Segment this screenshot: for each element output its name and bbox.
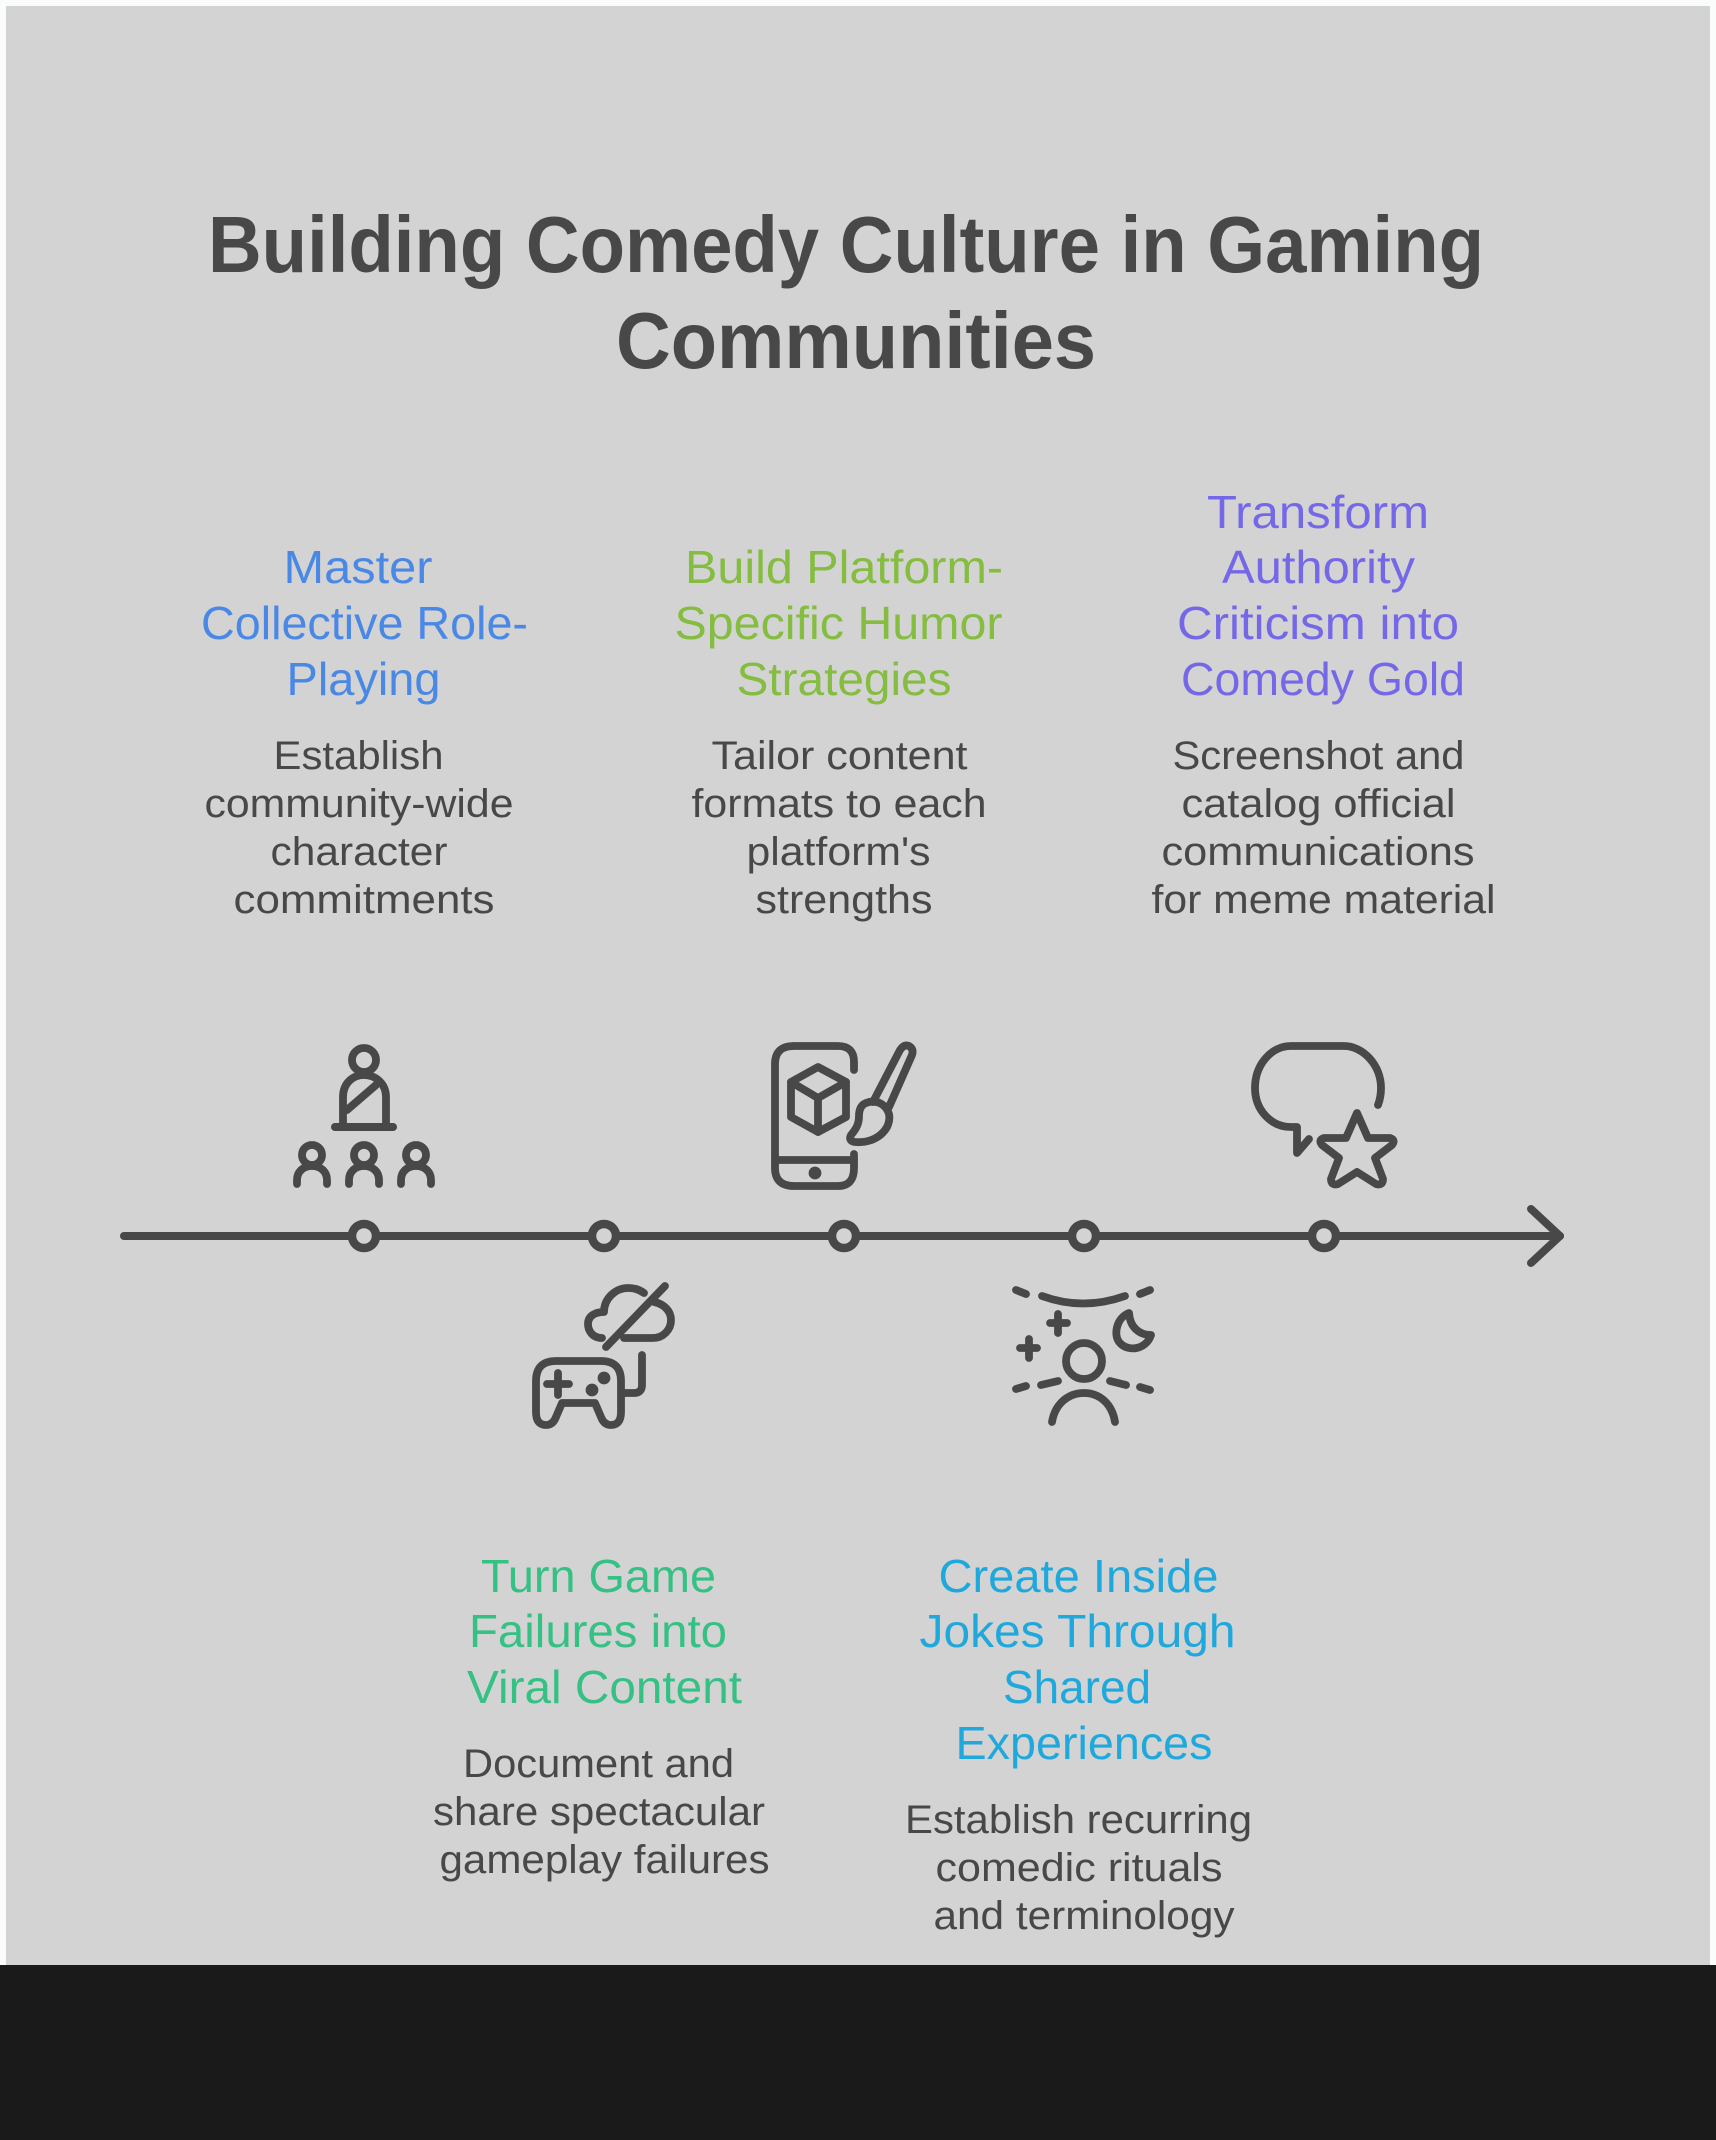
heading: Transform Authority Criticism into Comedy Gold — [1177, 486, 1465, 705]
panel: step 4 text — [905, 1550, 1252, 1938]
dark footer band — [0, 1965, 1716, 2140]
description: step 3: platform's — [746, 830, 930, 874]
description: step 2: gameplay failures — [440, 1838, 770, 1882]
icon: leader and group — [297, 1048, 431, 1184]
panel: step 1 text — [201, 541, 528, 922]
heading: Create Inside Jokes Through Shared Experiences — [920, 1550, 1236, 1769]
description: step 2: share spectacular — [433, 1790, 765, 1834]
description: step 1: Establish — [274, 734, 444, 778]
heading: Turn Game Failures into Viral Content: Turn Game — [481, 1550, 716, 1602]
description: step 2 — [433, 1742, 770, 1882]
description: step 3: Tailor content — [712, 734, 968, 778]
description: step 3: strengths — [756, 878, 932, 922]
heading: Master Collective Role-Playing: Playing — [286, 653, 440, 705]
description: step 5: communications — [1162, 830, 1474, 874]
description: step 3 — [692, 734, 986, 922]
icon: game controller with crossed-out cloud — [536, 1286, 671, 1425]
heading: Transform Authority Criticism into Comedy Gold: Authority — [1222, 541, 1415, 593]
title: Building Comedy Culture in Gaming — [208, 200, 1484, 289]
description: step 5: Screenshot and — [1172, 734, 1464, 778]
panel: step 3 text — [674, 541, 1003, 922]
description: step 5 — [1152, 734, 1496, 922]
heading: Transform Authority Criticism into Comedy Gold: Transform — [1207, 486, 1429, 538]
description: step 5: catalog official — [1182, 782, 1456, 826]
description: step 4: Establish recurring — [905, 1798, 1252, 1842]
heading: Build Platform-Specific Humor Strategies: Specific Humor — [674, 597, 1002, 649]
heading: Create Inside Jokes Through Shared Experiences: Shared — [1003, 1661, 1151, 1713]
title: Communities — [616, 296, 1096, 385]
heading: Create Inside Jokes Through Shared Experiences: Create Inside — [938, 1550, 1218, 1602]
heading: Turn Game Failures into Viral Content: Viral Content — [467, 1661, 742, 1713]
heading: Create Inside Jokes Through Shared Experiences: Jokes Through — [920, 1605, 1236, 1657]
description: step 3: formats to each — [692, 782, 986, 826]
panel: step 2 text — [433, 1550, 770, 1882]
heading: Turn Game Failures into Viral Content — [467, 1550, 742, 1713]
heading: Master Collective Role-Playing — [201, 541, 528, 705]
heading: Master Collective Role-Playing: Master — [284, 541, 432, 593]
description: step 4: comedic rituals — [936, 1846, 1222, 1890]
panel: step 5 text — [1152, 486, 1496, 922]
title — [208, 200, 1484, 385]
heading: Build Platform-Specific Humor Strategies — [674, 541, 1003, 705]
description: step 1: commitments — [234, 878, 494, 922]
description: step 1: character — [270, 830, 448, 874]
heading: Build Platform-Specific Humor Strategies: Strategies — [736, 653, 952, 705]
description: step 2: Document and — [463, 1742, 734, 1786]
description: step 1: community-wide — [204, 782, 514, 826]
description: step 5: for meme material — [1152, 878, 1496, 922]
icon: person with stars and moon — [1016, 1290, 1151, 1422]
description: step 4 — [905, 1798, 1252, 1938]
heading: Transform Authority Criticism into Comedy Gold: Comedy Gold — [1181, 653, 1465, 705]
heading: Transform Authority Criticism into Comedy Gold: Criticism into — [1177, 597, 1459, 649]
description: step 1 — [204, 734, 514, 922]
icon: speech bubble with star — [1255, 1046, 1394, 1184]
timeline arrow — [124, 1209, 1560, 1263]
icon: phone with cube and paintbrush — [775, 1046, 913, 1186]
heading: Create Inside Jokes Through Shared Experiences: Experiences — [956, 1717, 1212, 1769]
heading: Master Collective Role-Playing: Collective Role- — [201, 597, 528, 649]
timeline nodes — [352, 1224, 1336, 1248]
heading: Turn Game Failures into Viral Content: Failures into — [469, 1605, 727, 1657]
heading: Build Platform-Specific Humor Strategies: Build Platform- — [685, 541, 1003, 593]
description: step 4: and terminology — [934, 1894, 1234, 1938]
